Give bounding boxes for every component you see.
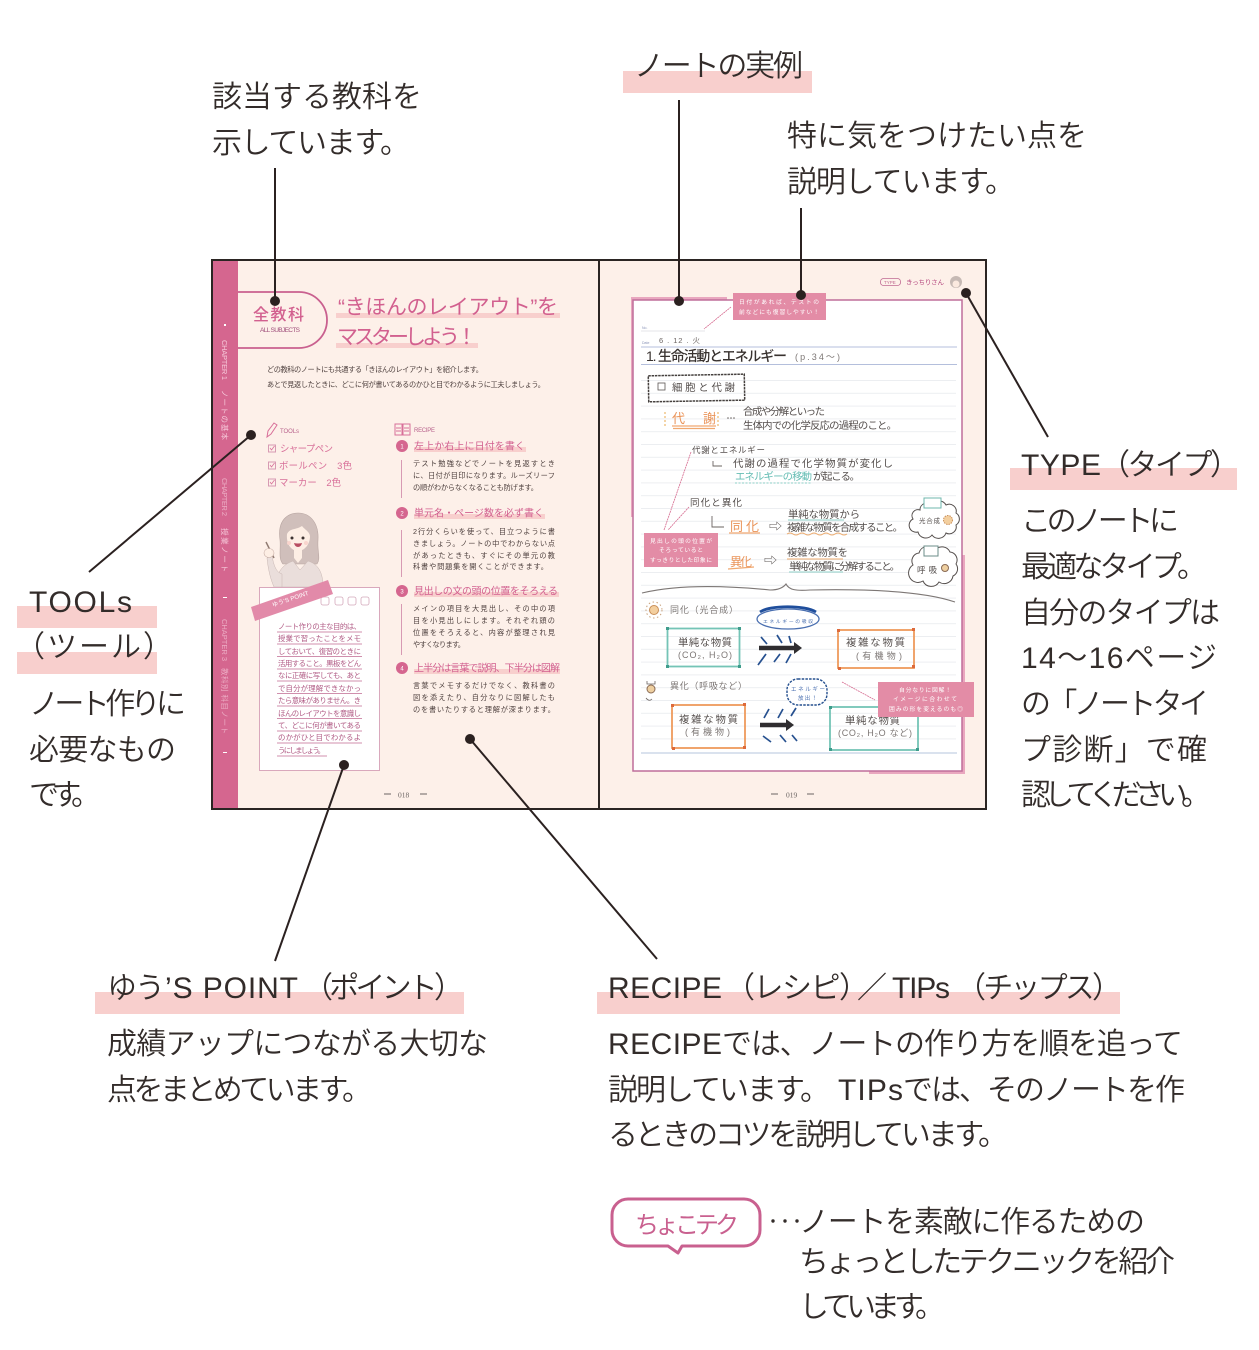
leader line: note example <box>674 100 684 306</box>
recipe step 2: 単元名・ページ数を必ず書く <box>414 506 544 520</box>
ribbon label: ゆう'S POINT <box>271 590 310 609</box>
subject tab <box>238 292 327 348</box>
cloud: photosynthesis <box>909 498 959 538</box>
note annotation: date tip <box>733 293 826 320</box>
tools list: マーカー 2色 <box>279 477 341 488</box>
tools list <box>267 423 352 488</box>
callout: point description: 点をまとめています。 <box>107 1074 372 1107</box>
recipe step 4: 上半分は言葉で説明、下半分は図解 <box>414 662 560 674</box>
page introduction: あとで見返したときに、どこに何が書いてあるのかひと目でわかるように工夫しましょう。 <box>267 380 545 389</box>
callout: tools description: 必要なもの <box>29 734 176 767</box>
left page sidebar chapter index: CHAPTER 1 <box>220 340 229 380</box>
note: assimilation: 単純な物質から <box>788 508 860 521</box>
heading: point: ’S POINT <box>165 972 298 1005</box>
page title: マスターしよう！ <box>337 326 477 349</box>
recipe step 4: 言葉でメモするだけでなく、教科書の <box>413 681 555 690</box>
section label box: 細胞と代謝 <box>672 381 735 394</box>
left page number <box>384 790 427 800</box>
leader line: recipe <box>465 734 657 959</box>
diagram row: dissimilation: エネルギー <box>791 686 825 693</box>
callout: subject <box>212 81 422 160</box>
heading: tools: （ツール） <box>15 631 173 664</box>
memo text: て、どこに何が書いてある <box>278 721 361 730</box>
callout: recipe description: 説明しています。 <box>608 1074 830 1107</box>
right page number <box>771 790 814 800</box>
note annotation: heading tip: 見出しの頭の位置が <box>650 537 712 545</box>
note: assimilation: 複雑な物質を合成すること。 <box>787 521 903 534</box>
recipe step 2: 2行分くらいを使って、目立つように書 <box>413 527 555 536</box>
recipe step 1: テスト勉強などでノートを見返すとき <box>413 459 555 468</box>
note annotation: diagram tip: 自分なりに図解！ <box>899 686 951 694</box>
callout: tools description: ノート作りに <box>29 688 186 721</box>
callout: type description: プ診断」で確 <box>1021 734 1207 767</box>
callout: type description <box>1021 505 1220 812</box>
note: dissimilation <box>728 546 900 573</box>
memo text: 授業で習ったことをメモ <box>278 634 361 643</box>
recipe header: RECIPE <box>414 428 435 434</box>
tools list: TOOLs <box>280 429 299 435</box>
callout: recipe description: るときのコツを説明しています。 <box>608 1119 1008 1152</box>
diagram row: dissimilation: (有機物) <box>685 726 730 737</box>
recipe step 1: 1 <box>400 444 404 450</box>
term: metabolism: 生体内での化学反応の過程のこと。 <box>743 419 897 432</box>
memo text: たら意味がありません。き <box>278 696 361 705</box>
note: metabolism and energy: 代謝とエネルギー <box>692 445 765 455</box>
left page sidebar chapter index: 教科別 科目ノート <box>220 668 230 734</box>
page introduction: どの教科のノートにも共通する「きほんのレイアウト」を紹介します。 <box>267 365 483 374</box>
note: assimilation: 同化と異化 <box>690 498 742 509</box>
open notebook spread <box>212 260 986 809</box>
subject tab: 全教科 <box>253 306 304 324</box>
heading: note example: ノートの実例 <box>634 50 803 83</box>
note annotation: heading tip: そろっていると <box>659 547 703 554</box>
panel: sample note sheet <box>633 293 974 771</box>
term: metabolism: 合成や分解といった <box>743 405 825 418</box>
note header lines <box>641 326 957 753</box>
heading: recipe and tips: TIPs <box>892 972 950 1005</box>
recipe step 4: のを書いたりすると理解が深まります。 <box>413 705 555 714</box>
note: metabolism and energy: エネルギーの移動 <box>735 470 812 483</box>
recipe step 4 <box>396 662 560 714</box>
cloud: respiration <box>909 546 958 586</box>
note title: 1. 生命活動とエネルギー <box>646 348 787 364</box>
callout: type description: 自分のタイプは <box>1021 597 1220 630</box>
note header lines: 6 . 12 . 火 <box>659 336 700 345</box>
heading: point: （ポイント） <box>303 972 464 1005</box>
heading: tools: TOOLs <box>29 586 132 619</box>
illustration: girl with pen <box>264 513 323 587</box>
memo text: 活用すること。黒板をどん <box>278 659 361 668</box>
memo text: なに正確に写しても、あと <box>278 671 361 680</box>
note: metabolism and energy <box>692 445 893 483</box>
diagram row: assimilation: エネルギーの吸収 <box>763 619 813 625</box>
callout: recipe description: では、ノートの作り方を順を追って <box>722 1028 1183 1061</box>
note: dissimilation: 単純な物質に分解すること。 <box>789 560 900 573</box>
callout: choko-teku description: ちょっとしたテクニックを紹介 <box>799 1246 1175 1279</box>
recipe step 2: 科書や問題集を開くことができます。 <box>413 562 548 571</box>
callout: tools description: です。 <box>29 779 101 812</box>
diagram row: dissimilation: 放出！ <box>798 694 817 702</box>
recipe step 2 <box>396 506 555 577</box>
diagram row: dissimilation <box>646 679 919 751</box>
note header lines: No. <box>642 326 647 330</box>
callout: type description: の「ノートタイ <box>1021 688 1209 721</box>
heading: type: TYPE <box>1021 449 1101 482</box>
callout: recipe description: では、そのノートを作 <box>903 1074 1185 1107</box>
memo text: で自分が理解できなかっ <box>278 684 361 693</box>
note page shadows <box>631 297 965 774</box>
recipe step 3: 見出しの文の頭の位置をそろえる <box>414 584 558 598</box>
leader line: tools <box>89 430 256 572</box>
callout: subject: 該当する教科を <box>212 81 422 114</box>
note annotation: heading tip <box>644 533 718 567</box>
note header lines: Date <box>642 341 649 345</box>
callout: point description: 成績アップにつながる大切な <box>107 1028 488 1061</box>
leader line: subject <box>270 168 280 306</box>
note: metabolism and energy: が起こる。 <box>813 470 860 483</box>
pointer lines on note <box>664 307 875 700</box>
recipe step 3: やすくなります。 <box>413 640 465 649</box>
subject tab: ALL SUBJECTS <box>260 327 301 334</box>
callout: recipe description <box>608 1028 1185 1152</box>
recipe step 3: メインの項目を大見出し、その中の項 <box>413 604 556 613</box>
callout: point description <box>107 1028 488 1107</box>
note annotation: date tip: 前などにも復習しやすい！ <box>739 308 819 316</box>
diagram row: assimilation <box>646 602 915 670</box>
callout: type description: 認してください。 <box>1021 779 1211 812</box>
callout: recipe description: RECIPE <box>608 1028 722 1061</box>
memo text: うにしましょう。 <box>278 746 325 755</box>
note: assimilation: 同化 <box>730 519 759 534</box>
callout: type description: 14〜16ページ <box>1021 642 1217 675</box>
leader line: point <box>275 760 349 961</box>
note annotation: diagram tip: イメージに合わせて <box>893 695 957 703</box>
note: assimilation <box>690 498 903 535</box>
type tag with avatar: きっちりさん <box>906 278 944 286</box>
callout: type description: 最適なタイプ。 <box>1021 551 1207 584</box>
recipe step 1: に、日付が目印になります。ルーズリーフ <box>413 471 555 480</box>
recipe step 2: があったときも、すぐにその単元の教 <box>413 551 555 560</box>
callout: tools description <box>29 688 186 812</box>
note: assimilation: ⇨ <box>769 519 782 534</box>
curly brace <box>642 584 955 602</box>
term: metabolism: 代謝 <box>672 411 716 426</box>
diagram row: assimilation: (有機物) <box>856 650 902 661</box>
heading: tools <box>15 586 173 674</box>
memo text: ノート作りの主な目的は、 <box>278 622 361 631</box>
memo text: ほんのレイアウトを意識し <box>278 709 361 718</box>
right page number: 019 <box>786 790 798 800</box>
heading: point: ゆう <box>107 972 165 1005</box>
left page sidebar chapter index: CHAPTER 2 <box>220 478 229 516</box>
type tag with avatar <box>880 276 962 288</box>
callout: choko-teku description: しています。 <box>799 1291 945 1324</box>
left page number: 018 <box>398 790 410 800</box>
recipe step 1: 左上か右上に日付を書く <box>414 440 525 452</box>
recipe step 4: 4 <box>400 666 404 672</box>
callout: choko-teku description: ノートを素敵に作るための <box>799 1206 1145 1239</box>
left page sidebar chapter index <box>220 324 230 753</box>
diagram row: assimilation: 単純な物質 <box>678 636 732 649</box>
heading: type <box>1010 449 1240 490</box>
speech bubble: choko-teku <box>612 1199 760 1253</box>
note annotation: diagram tip <box>878 682 974 717</box>
callout: recipe description: TIPs <box>838 1074 903 1107</box>
leader line: caution point <box>796 208 806 300</box>
heading: recipe and tips: RECIPE <box>608 972 722 1005</box>
note: metabolism and energy: 代謝の過程で化学物質が変化し <box>733 457 893 470</box>
left page sidebar chapter index: ノートの基本 <box>220 390 230 440</box>
callout: type description: このノートに <box>1021 505 1179 538</box>
callout: caution point: 特に気をつけたい点を <box>787 120 1087 153</box>
page introduction <box>267 365 545 389</box>
diagram row: dissimilation: 単純な物質 <box>845 714 900 727</box>
heading: recipe and tips: （レシピ） <box>725 972 869 1005</box>
heading: recipe and tips: ／ <box>857 972 887 1005</box>
heading: type: （タイプ） <box>1100 449 1240 482</box>
recipe header <box>395 424 435 435</box>
recipe step 3: 目を小見出しにします。それぞれ頭の <box>413 616 555 625</box>
heading: note example <box>623 50 812 93</box>
recipe step 3 <box>396 584 559 655</box>
note annotation: heading tip: すっきりとした印象に <box>650 556 712 564</box>
cloud: photosynthesis: 光合成 <box>919 516 940 525</box>
heading: recipe and tips <box>597 972 1122 1014</box>
note: dissimilation: 異化 <box>730 555 752 569</box>
cloud: respiration: 呼吸 <box>917 565 937 575</box>
panel: you's point memo <box>251 580 380 770</box>
term: metabolism <box>665 405 897 432</box>
recipe step 1: の順がわからなくなることも防げます。 <box>413 483 538 492</box>
heading: recipe and tips: （チップス） <box>956 972 1122 1005</box>
note annotation: diagram tip: 囲みの形を変えるのも◎ <box>889 705 963 713</box>
note: dissimilation: 複雑な物質を <box>787 546 848 559</box>
callout: choko-teku description <box>771 1206 1175 1324</box>
recipe step 4: 図を添えたり、自分なりに図解したも <box>413 693 555 702</box>
diagram row: dissimilation: (CO₂, H₂O など) <box>838 728 912 738</box>
recipe step 2: 2 <box>400 512 404 518</box>
diagram row: dissimilation: 複雑な物質 <box>679 713 738 726</box>
memo text: のかがひと目でわかるよ <box>278 733 361 742</box>
section label box <box>648 374 745 402</box>
memo binding holes <box>321 597 369 605</box>
type tag with avatar: TYPE <box>884 280 896 285</box>
diagram row: assimilation: (CO₂, H₂O) <box>678 650 732 660</box>
memo text <box>277 622 362 756</box>
leader line: type <box>961 288 1048 437</box>
speech bubble: choko-teku: ちょこテク <box>635 1212 739 1239</box>
diagram row: assimilation: 同化（光合成） <box>670 604 738 615</box>
page title <box>336 296 560 349</box>
callout: caution point <box>787 120 1087 199</box>
memo text: しておいて、復習のときに <box>278 647 361 656</box>
page title: “きほんのレイアウト”を <box>338 296 558 319</box>
left page sidebar chapter index: 授業ノート <box>220 528 230 572</box>
note: dissimilation: ⇨ <box>764 553 777 568</box>
recipe step 1 <box>396 440 555 498</box>
recipe step 3: 3 <box>400 590 404 596</box>
heading: point <box>95 972 464 1014</box>
ribbon label <box>251 580 333 621</box>
callout: caution point: 説明しています。 <box>787 166 1015 199</box>
callout: subject: 示しています。 <box>212 127 410 160</box>
tools list: ボールペン 3色 <box>279 460 352 471</box>
recipe step 3: 位置をそろえると、内容が整理され見 <box>413 628 555 637</box>
note title: (p.34〜) <box>795 352 840 362</box>
recipe step 2: きましょう。ノートの中でわからない点 <box>413 539 555 548</box>
diagram row: dissimilation: 異化（呼吸など） <box>670 681 747 691</box>
diagram row: assimilation: 複雑な物質 <box>846 636 905 649</box>
note annotation: date tip: 日付があれば、テストの <box>739 298 819 306</box>
tools list: シャープペン <box>280 443 333 454</box>
left page sidebar chapter index: CHAPTER 3 <box>220 619 229 661</box>
